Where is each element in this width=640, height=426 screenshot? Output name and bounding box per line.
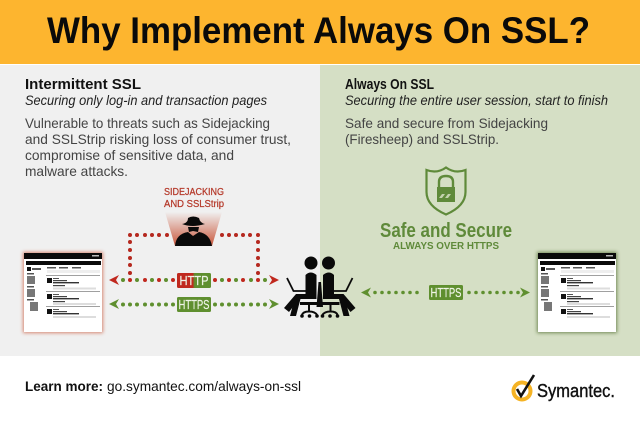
text block: always on SSL benefits xyxy=(345,115,548,147)
text: learn more link: Learn more: xyxy=(25,378,103,394)
panel: always on SSL xyxy=(320,65,640,356)
callout: sidejacking and SSLStrip: SIDEJACKING xyxy=(164,186,224,198)
text block: always on SSL benefits: Safe and secure from Sidejacking xyxy=(345,115,548,131)
text: safe and secure: Safe and Secure xyxy=(380,220,512,242)
arrow: HTTPS connection left xyxy=(109,297,279,312)
text: always over HTTPS: ALWAYS OVER HTTPS xyxy=(393,240,499,252)
logo: Symantec: Symantec. xyxy=(537,381,615,401)
callout: sidejacking and SSLStrip xyxy=(164,186,224,210)
subheading: always on SSL: Securing the entire user session, start to finish xyxy=(345,92,608,108)
text block: intermittent SSL risks: Vulnerable to threats such as Sidejacking xyxy=(25,115,270,131)
panel: intermittent SSL xyxy=(0,65,320,356)
text block: intermittent SSL risks xyxy=(25,115,291,179)
subheading: intermittent SSL: Securing only log-in and transaction pages xyxy=(25,92,267,108)
text block: always on SSL benefits: (Firesheep) and SSLStrip. xyxy=(345,131,499,147)
text: learn more link: go.symantec.com/always-on-ssl xyxy=(107,378,301,394)
icon: shield with padlock xyxy=(426,168,466,214)
logo: Symantec xyxy=(514,375,615,401)
arrow: attacker interception path xyxy=(128,233,260,275)
arrow: HTTPS connection right xyxy=(361,285,530,300)
arrow: HTTP connection xyxy=(109,273,279,288)
text block: intermittent SSL risks: and SSLStrip risking loss of consumer trust, xyxy=(25,131,291,147)
title: Why Implement Always On SSL? xyxy=(47,10,590,51)
text block: intermittent SSL risks: compromise of sensitive data, and xyxy=(25,147,234,163)
heading: always on SSL: Always On SSL xyxy=(345,76,434,93)
heading: intermittent SSL: Intermittent SSL xyxy=(25,76,141,93)
callout: sidejacking and SSLStrip: AND SSLStrip xyxy=(164,198,224,210)
icon: browser page left xyxy=(23,252,103,333)
label: HTTPS pill right: HTTPS xyxy=(430,285,462,300)
panel: title banner xyxy=(0,0,640,64)
label: HTTPS pill left: HTTPS xyxy=(178,297,210,312)
icon: two users back to back xyxy=(284,256,356,318)
text block: intermittent SSL risks: malware attacks. xyxy=(25,163,128,179)
label: HTTP pill: HTTP xyxy=(180,273,208,288)
icon: browser page right xyxy=(537,252,617,333)
icon: spy in spotlight xyxy=(165,212,222,246)
